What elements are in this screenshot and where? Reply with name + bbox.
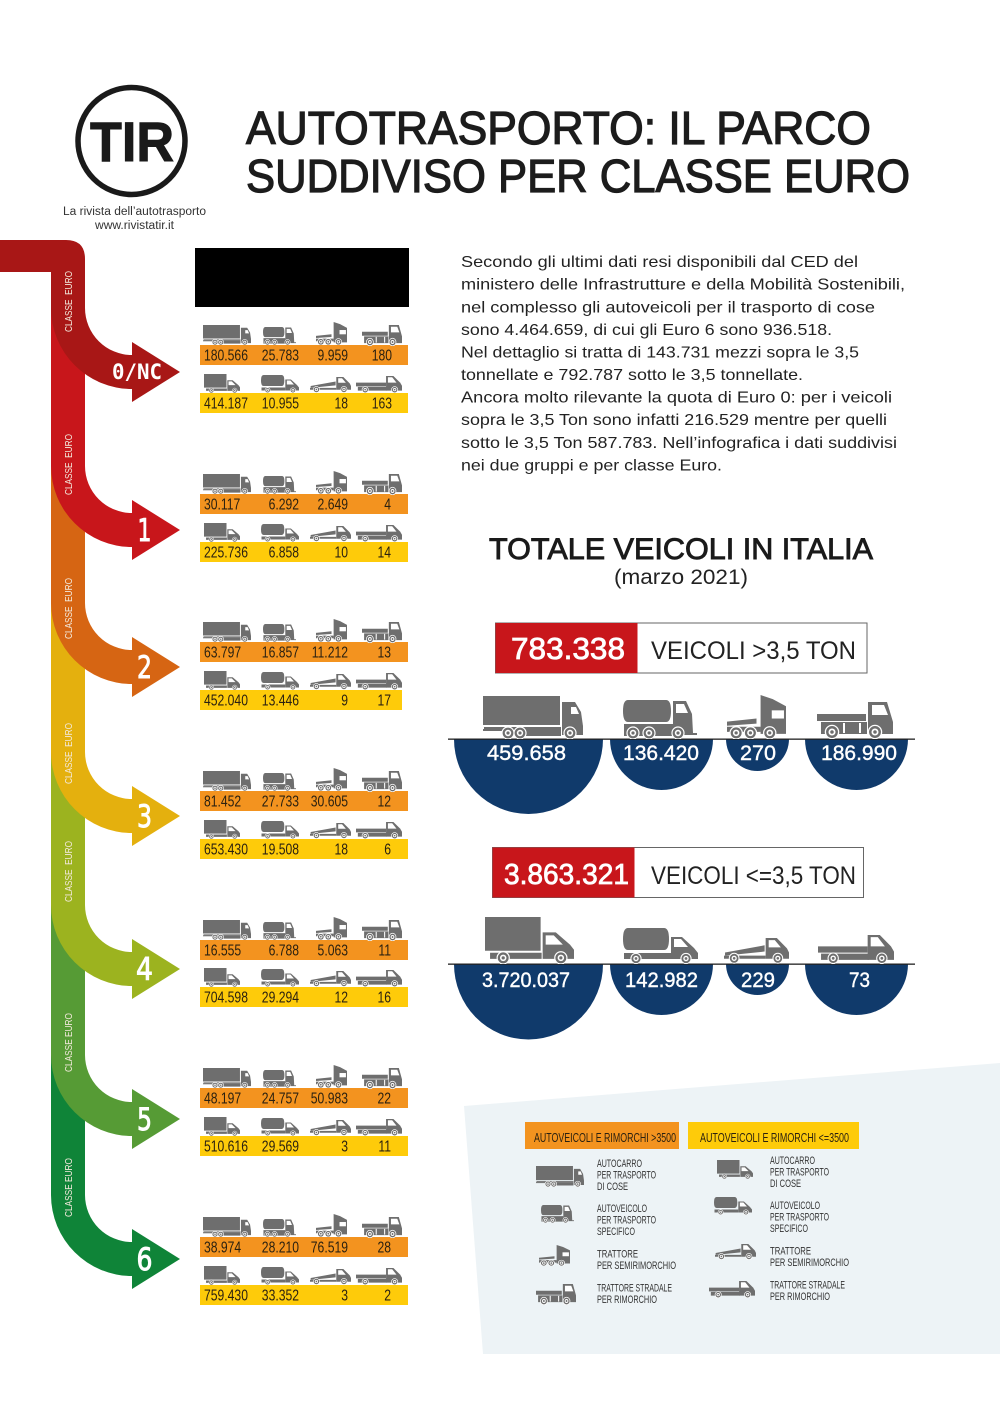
total box: over 3.5 ton: 783.338	[511, 631, 625, 666]
heading: totale veicoli: (marzo 2021)	[614, 566, 748, 589]
half-circle chart: under 3.5 ton: 3.720.037	[482, 969, 570, 992]
row over 3.5 ton: 16.857	[262, 643, 299, 661]
data: class 4	[200, 917, 408, 1007]
row over 3.5 ton: 48.197	[204, 1089, 241, 1107]
row under 3.5 ton: 2	[384, 1286, 391, 1304]
legend column: up to 3500: AUTOCARRO	[770, 1155, 815, 1167]
total box: under 3.5 ton	[492, 848, 864, 898]
data: class 0/NC	[200, 322, 408, 413]
row over 3.5 ton: 81.452	[204, 792, 241, 810]
row over 3.5 ton	[200, 1214, 408, 1257]
row under 3.5 ton: 14	[377, 543, 391, 561]
logo: La rivista dell’autotrasporto	[63, 206, 206, 218]
intro paragraph: sotto le 3,5 Ton 587.783. Nell’infografica i dati suddivisi	[461, 435, 897, 452]
row over 3.5 ton	[200, 619, 408, 662]
arrow: class 4: 4	[136, 952, 153, 988]
heading: totale veicoli	[489, 533, 873, 589]
row under 3.5 ton: 225.736	[204, 543, 248, 561]
row over 3.5 ton: 22	[377, 1089, 391, 1107]
half-circle chart: over 3.5 ton: 136.420	[623, 742, 699, 765]
row under 3.5 ton: 18	[334, 840, 348, 858]
legend column: up to 3500: PER SEMIRIMORCHIO	[770, 1257, 849, 1269]
row under 3.5 ton: 3	[341, 1286, 348, 1304]
row under 3.5 ton	[200, 671, 402, 710]
data: class 5	[200, 1065, 408, 1156]
arrow: class 5: 5	[137, 1102, 152, 1138]
row over 3.5 ton: 4	[384, 495, 391, 513]
legend column: up to 3500	[688, 1122, 859, 1303]
row over 3.5 ton: 63.797	[204, 643, 241, 661]
legend column: over 3500: SPECIFICO	[597, 1226, 635, 1238]
row over 3.5 ton: 180	[372, 346, 392, 364]
arrow: class 3: 3	[137, 799, 152, 835]
arrow: class 0/NC	[0, 240, 180, 402]
row under 3.5 ton: 163	[372, 394, 392, 412]
intro paragraph: nei due gruppi e per classe Euro.	[461, 458, 722, 474]
row under 3.5 ton: 18	[334, 394, 348, 412]
arrow: class 2: CLASSE EURO	[64, 578, 75, 639]
row under 3.5 ton: 414.187	[204, 394, 248, 412]
title: SUDDIVISO PER CLASSE EURO	[246, 150, 910, 202]
intro paragraph: Nel dettaglio si tratta di 143.731 mezzi sopra le 3,5	[461, 344, 859, 362]
row under 3.5 ton: 17	[377, 691, 391, 709]
logo: www.rivistatir.it	[94, 220, 175, 232]
heading: totale veicoli: TOTALE VEICOLI IN ITALIA	[489, 533, 873, 566]
row under 3.5 ton	[200, 523, 408, 562]
legend column: over 3500: PER TRASPORTO	[597, 1170, 656, 1182]
row under 3.5 ton: 12	[334, 988, 348, 1006]
legend column: up to 3500: AUTOVEICOLI E RIMORCHI <=3500	[700, 1130, 849, 1145]
data: class 3	[200, 768, 408, 859]
legend column: over 3500: PER RIMORCHIO	[597, 1294, 657, 1306]
row over 3.5 ton: 5.063	[318, 941, 348, 959]
row under 3.5 ton: 759.430	[204, 1286, 248, 1304]
row under 3.5 ton: 33.352	[262, 1286, 299, 1304]
row over 3.5 ton: 180.566	[204, 346, 248, 364]
logo: TIR	[90, 110, 174, 173]
half-circle chart: over 3.5 ton: 459.658	[487, 742, 566, 765]
row under 3.5 ton: 6	[384, 840, 391, 858]
row over 3.5 ton: 25.783	[262, 346, 299, 364]
arrow: class 6: CLASSE EURO	[64, 1158, 75, 1217]
row under 3.5 ton: 10	[334, 543, 348, 561]
total box: under 3.5 ton: VEICOLI <=3,5 TON	[651, 862, 856, 890]
legend column: up to 3500: TRATTORE	[770, 1246, 811, 1258]
half-circle chart: under 3.5 ton: 142.982	[625, 969, 698, 992]
row under 3.5 ton: 9	[341, 691, 348, 709]
row over 3.5 ton	[200, 917, 408, 960]
row under 3.5 ton: 13.446	[262, 691, 299, 709]
row under 3.5 ton: 29.294	[262, 988, 299, 1006]
row under 3.5 ton: 11	[378, 1137, 391, 1155]
row under 3.5 ton: 653.430	[204, 840, 248, 858]
intro paragraph: ministero delle Infrastrutture e della Mobilità Sostenibili,	[461, 276, 905, 294]
row under 3.5 ton: 704.598	[204, 988, 248, 1006]
legend column: over 3500: TRATTORE STRADALE	[597, 1282, 672, 1294]
row over 3.5 ton	[200, 322, 408, 365]
row under 3.5 ton: 29.569	[262, 1137, 299, 1155]
row over 3.5 ton: 28.210	[262, 1238, 299, 1256]
intro paragraph: Ancora molto rilevante la quota di Euro 0: per i veicoli	[461, 390, 892, 406]
legend column: over 3500: AUTOCARRO	[597, 1158, 642, 1170]
row over 3.5 ton: 6.788	[269, 941, 299, 959]
legend column: up to 3500: SPECIFICO	[770, 1223, 808, 1235]
row over 3.5 ton: 24.757	[262, 1089, 299, 1107]
arrow: class 6	[51, 1050, 180, 1289]
total box: under 3.5 ton: 3.863.321	[504, 859, 629, 891]
legend column: up to 3500: AUTOVEICOLO	[770, 1200, 820, 1212]
row over 3.5 ton: 76.519	[311, 1238, 348, 1256]
row under 3.5 ton: 510.616	[204, 1137, 248, 1155]
data: class 1	[200, 471, 408, 562]
arrow: class 3: CLASSE EURO	[64, 723, 75, 784]
legend column: over 3500	[525, 1122, 679, 1306]
row over 3.5 ton: 12	[377, 792, 391, 810]
row under 3.5 ton	[200, 1266, 408, 1305]
arrow: class 3	[51, 603, 180, 846]
half-circle chart: under 3.5 ton: 229	[741, 969, 775, 992]
legend column: over 3500: TRATTORE	[597, 1248, 638, 1260]
intro paragraph: sono 4.464.659, di cui gli Euro 6 sono 936.518.	[461, 322, 832, 339]
arrow: class 4: CLASSE EURO	[64, 841, 75, 902]
row over 3.5 ton	[200, 768, 408, 811]
legend column: over 3500: PER SEMIRIMORCHIO	[597, 1260, 676, 1272]
intro paragraph: sopra le 3,5 Ton sono infatti 216.529 mentre per quelli	[461, 412, 887, 429]
title: AUTOTRASPORTO: IL PARCO	[246, 102, 871, 154]
row over 3.5 ton: 11	[378, 941, 391, 959]
row over 3.5 ton: 27.733	[262, 792, 299, 810]
row over 3.5 ton: 38.974	[204, 1238, 241, 1256]
row over 3.5 ton: 30.117	[204, 495, 241, 513]
half-circle chart: over 3.5 ton	[448, 695, 915, 814]
legend column: up to 3500: PER TRASPORTO	[770, 1166, 829, 1178]
legend column: over 3500: PER TRASPORTO	[597, 1214, 656, 1226]
row under 3.5 ton: 6.858	[269, 543, 299, 561]
row under 3.5 ton: 16	[377, 988, 391, 1006]
intro paragraph	[461, 254, 905, 474]
row under 3.5 ton: 3	[341, 1137, 348, 1155]
arrow: class 1: 1	[138, 513, 152, 549]
arrow: class 1	[51, 308, 180, 560]
row under 3.5 ton: 10.955	[262, 394, 299, 412]
total box: over 3.5 ton: VEICOLI >3,5 TON	[651, 637, 856, 665]
title	[246, 102, 910, 202]
arrow: class 0/NC: CLASSE EURO	[64, 271, 75, 332]
row over 3.5 ton: 6.292	[269, 495, 299, 513]
arrow: class 2	[51, 466, 180, 697]
half-circle chart: under 3.5 ton: 73	[849, 969, 870, 992]
legend column: over 3500: DI COSE	[597, 1181, 628, 1193]
row over 3.5 ton: 9.959	[318, 346, 348, 364]
data: class 6	[200, 1214, 408, 1305]
black redacted block	[195, 248, 409, 307]
intro paragraph: tonnellate e 792.787 sotto le 3,5 tonnellate.	[461, 367, 803, 384]
legend column: up to 3500: DI COSE	[770, 1178, 801, 1190]
row under 3.5 ton	[200, 1117, 408, 1156]
total box: over 3.5 ton	[496, 623, 867, 673]
row under 3.5 ton	[200, 968, 408, 1007]
row over 3.5 ton: 30.605	[311, 792, 348, 810]
legend column: up to 3500: PER RIMORCHIO	[770, 1291, 830, 1303]
row over 3.5 ton: 28	[377, 1238, 391, 1256]
panel: legend	[464, 1063, 1000, 1354]
half-circle chart: over 3.5 ton: 186.990	[821, 742, 897, 765]
euro class arrows	[0, 240, 180, 1289]
legend column: over 3500: AUTOVEICOLI E RIMORCHI >3500	[534, 1130, 676, 1145]
row over 3.5 ton	[200, 1065, 408, 1108]
row over 3.5 ton: 50.983	[311, 1089, 348, 1107]
row over 3.5 ton: 13	[377, 643, 391, 661]
row under 3.5 ton	[200, 374, 408, 413]
legend column: up to 3500: PER TRASPORTO	[770, 1212, 829, 1224]
legend column: over 3500: AUTOVEICOLO	[597, 1203, 647, 1215]
data: class 2	[200, 619, 408, 710]
row over 3.5 ton: 11.212	[312, 643, 348, 661]
arrow: class 4	[51, 752, 180, 999]
row under 3.5 ton: 452.040	[204, 691, 248, 709]
arrow: class 1: CLASSE EURO	[64, 434, 75, 495]
arrow: class 5: CLASSE EURO	[64, 1013, 75, 1072]
row over 3.5 ton	[200, 471, 408, 514]
arrow: class 6: 6	[136, 1242, 152, 1278]
intro paragraph: Secondo gli ultimi dati resi disponibili dal CED del	[461, 254, 858, 271]
arrow: class 5	[51, 905, 180, 1149]
row under 3.5 ton: 19.508	[262, 840, 299, 858]
row over 3.5 ton: 16.555	[204, 941, 241, 959]
arrow: class 2: 2	[137, 650, 152, 686]
row over 3.5 ton: 2.649	[318, 495, 348, 513]
logo	[63, 88, 206, 232]
half-circle chart: under 3.5 ton	[448, 917, 915, 1040]
half-circle chart: over 3.5 ton: 270	[740, 742, 776, 765]
intro paragraph: nel complesso gli autoveicoli per il trasporto di cose	[461, 300, 875, 316]
legend column: up to 3500: TRATTORE STRADALE	[770, 1280, 845, 1292]
row under 3.5 ton	[200, 820, 408, 859]
arrow: class 0/NC: 0/NC	[112, 360, 162, 384]
